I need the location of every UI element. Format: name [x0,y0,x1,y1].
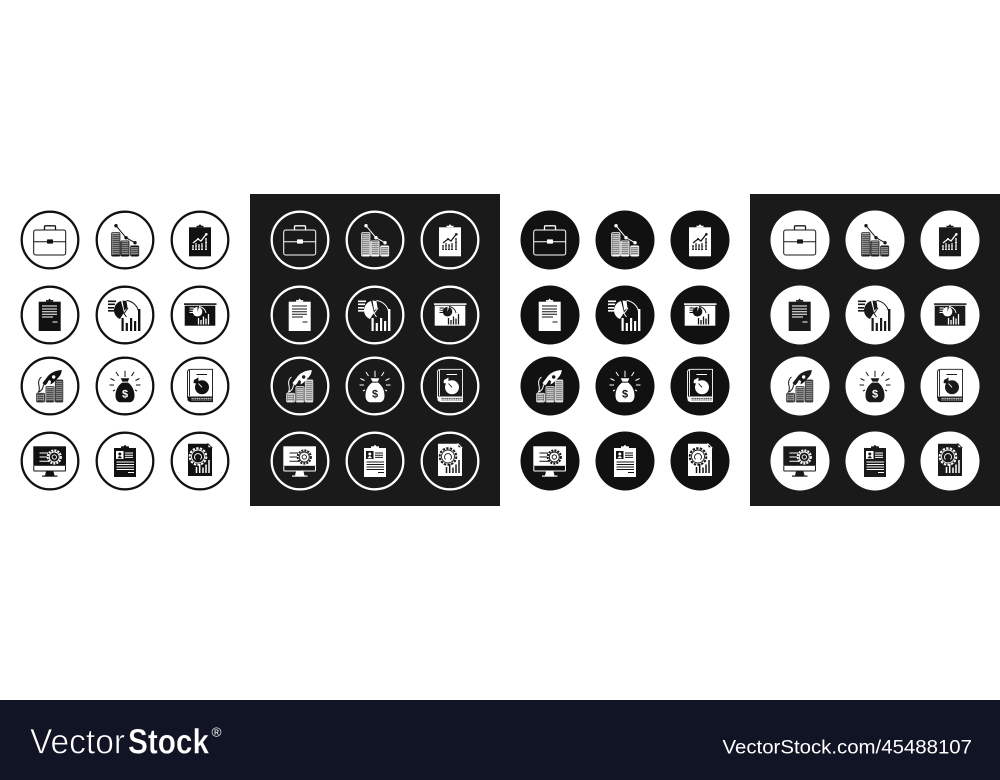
icon: resume clipboard [846,432,904,490]
icon: money bag [596,356,654,416]
icon: monitor with gear [520,432,580,490]
icon: monitor with gear [770,432,830,490]
icon: monitor with gear [272,433,328,489]
icon: resume clipboard [97,433,153,489]
panel: outlined rings on black [250,194,500,506]
icon: pie and bar chart [846,286,904,344]
icon: rocket and coins [272,358,328,414]
icon: clipboard with growth chart [172,212,228,268]
icon: money bag: $ [122,388,128,400]
footer bar [0,700,1000,780]
icon: briefcase [22,212,78,268]
icon: pie and bar chart [97,287,153,343]
footer logo: VectorStock: Vector [30,722,125,761]
icon: clipboard document [272,287,328,343]
icon: falling coin stacks [347,212,403,268]
footer logo: VectorStock: ® [212,724,222,740]
panel: black discs on white [520,210,730,490]
icon: briefcase [770,210,830,270]
icon: report book [172,358,228,414]
icon: clipboard document [22,287,78,343]
footer logo: VectorStock: Stock [128,722,209,761]
icon: falling coin stacks [97,212,153,268]
icon: gear chart document [422,433,478,489]
icon: report book [920,356,980,416]
icon: briefcase [272,212,328,268]
icon: clipboard with growth chart [422,212,478,268]
icon: gear chart document [172,433,228,489]
icon: money bag [97,358,153,414]
icon: presentation board [670,286,730,344]
icon: presentation board [422,287,478,343]
icon: money bag: $ [372,388,378,400]
panel: outlined rings on white [22,212,228,489]
icon: money bag: $ [872,388,878,400]
icon: rocket and coins [520,356,580,416]
panel: white discs on black [750,194,1000,506]
icon: rocket and coins [22,358,78,414]
icon: presentation board [172,287,228,343]
footer logo: VectorStock [30,722,222,761]
icon: report book [670,356,730,416]
icon: money bag [846,356,904,416]
icon: falling coin stacks [846,210,904,270]
icon: monitor with gear [22,433,78,489]
icon: falling coin stacks [596,210,654,270]
icon: resume clipboard [596,432,654,490]
icon: clipboard document [520,286,580,344]
icon: clipboard with growth chart [920,210,980,270]
icon: briefcase [520,210,580,270]
icon: pie and bar chart [596,286,654,344]
icon: report book [422,358,478,414]
icon: gear chart document [920,432,980,490]
icon: pie and bar chart [347,287,403,343]
icon: gear chart document [670,432,730,490]
icon: money bag: $ [622,388,628,400]
icon: presentation board [920,286,980,344]
icon: clipboard document [770,286,830,344]
icon: rocket and coins [770,356,830,416]
icon: resume clipboard [347,433,403,489]
footer image id: VectorStock.com/45488107 [722,736,972,758]
icon: money bag [347,358,403,414]
icon: clipboard with growth chart [670,210,730,270]
